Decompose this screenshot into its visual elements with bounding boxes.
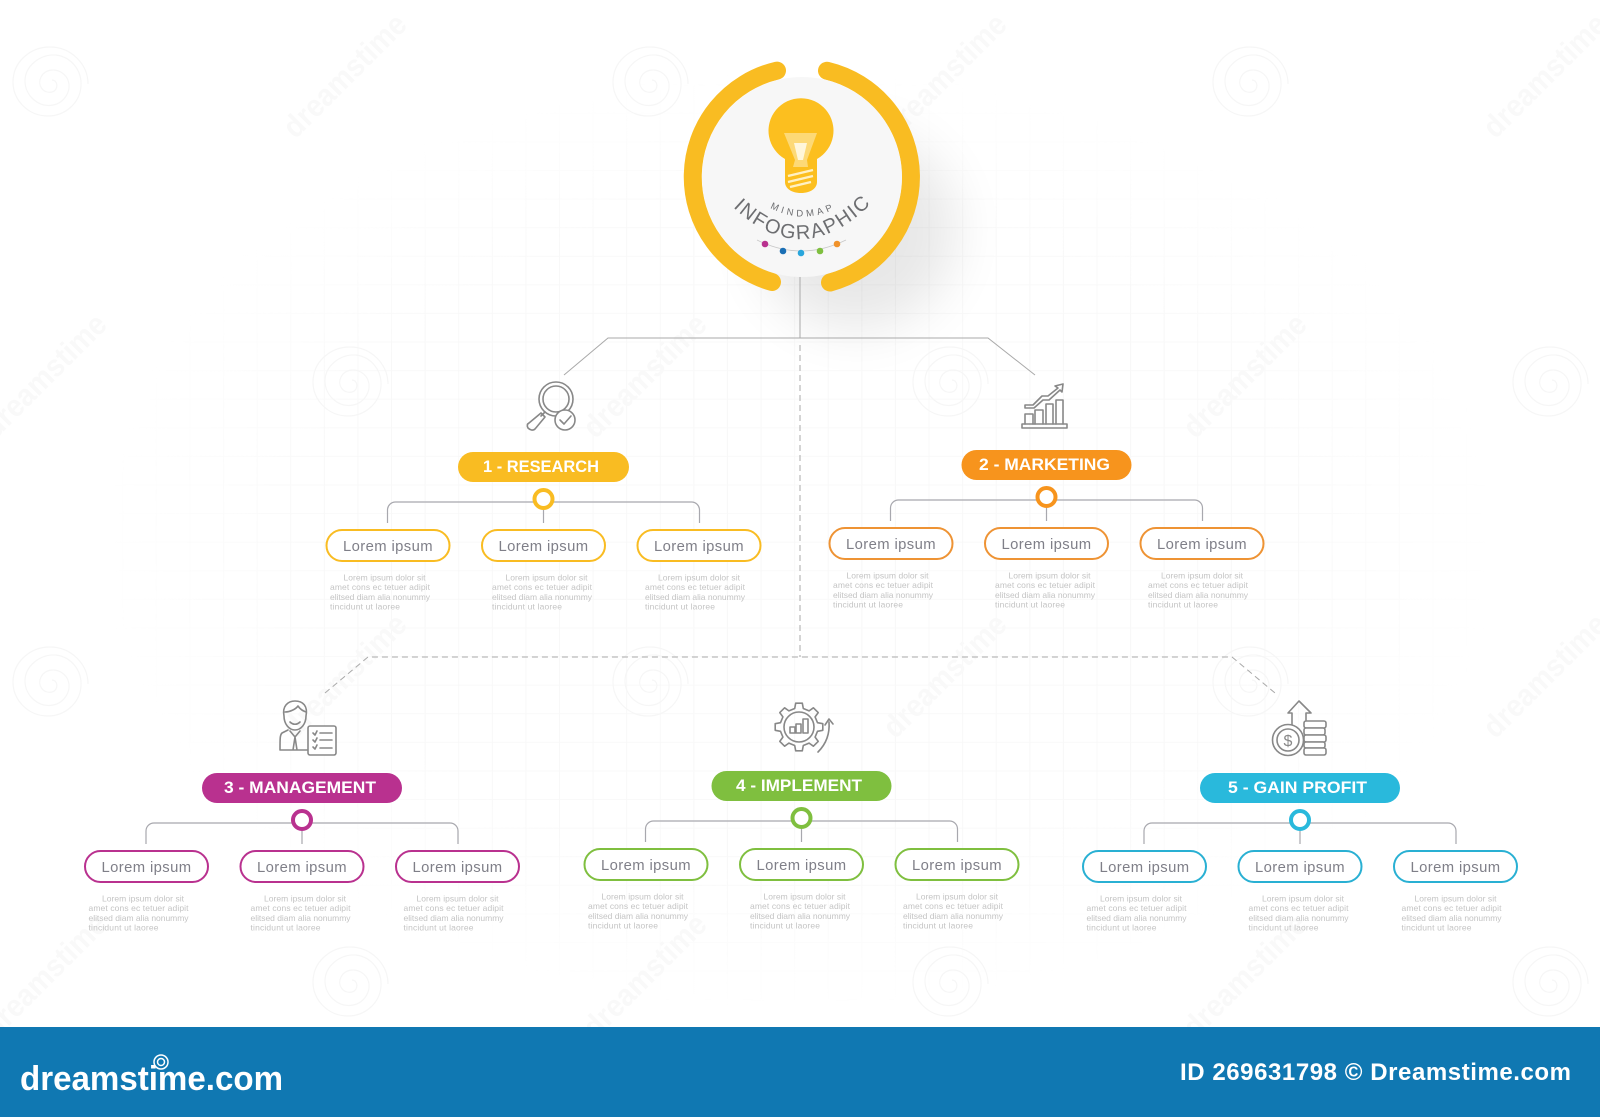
node ring: [534, 490, 552, 508]
item 3: [638, 530, 760, 612]
icon: magnifier with check: [527, 382, 575, 430]
item 2: Lorem ipsum dolor sit: [1262, 894, 1345, 904]
item 3: amet cons ec tetuer adipit: [1402, 903, 1502, 913]
item 3: Lorem ipsum dolor sit: [658, 572, 741, 582]
node ring: [1038, 488, 1056, 506]
item 3: [896, 849, 1018, 931]
icon: coins with up arrow: [1272, 701, 1326, 756]
item 3: Lorem ipsum dolor sit: [1161, 570, 1244, 580]
watermark text: dreamstime: [876, 607, 1014, 745]
item 3: amet cons ec tetuer adipit: [645, 582, 746, 592]
item 1: tincidunt ut laoree: [1086, 923, 1157, 933]
item 2: elitsed diam alia nonummy: [995, 590, 1096, 600]
item 1: tincidunt ut laoree: [88, 923, 159, 933]
item 1: amet cons ec tetuer adipit: [833, 580, 934, 590]
hub white disc: [702, 77, 902, 277]
item 3: Lorem ipsum: [654, 538, 744, 555]
item 2: tincidunt ut laoree: [250, 923, 321, 933]
section 4: implement: [584, 771, 1018, 931]
item 1: Lorem ipsum: [601, 857, 691, 874]
item 1: Lorem ipsum dolor sit: [102, 894, 185, 904]
item 3: Lorem ipsum dolor sit: [1414, 894, 1497, 904]
hub dotted garland: [757, 240, 846, 256]
item 1: amet cons ec tetuer adipit: [88, 903, 189, 913]
section 2: marketing: [830, 450, 1264, 610]
item 3: amet cons ec tetuer adipit: [404, 903, 504, 913]
watermark text: dreamstime: [576, 307, 714, 445]
watermark text: dreamstime: [276, 7, 414, 145]
node ring: [293, 811, 311, 829]
item 3: tincidunt ut laoree: [645, 602, 715, 612]
central hub: [684, 62, 920, 292]
pill: 2 - MARKETING: 2 - MARKETING: [979, 455, 1110, 474]
branch connector: [1144, 823, 1456, 844]
item 3: amet cons ec tetuer adipit: [903, 901, 1004, 911]
item 1: Lorem ipsum dolor sit: [602, 892, 684, 902]
item 1: [85, 851, 208, 933]
branch connector: [646, 821, 958, 842]
section 5: gain profit: [1083, 773, 1517, 933]
hub subtitle: MINDMAP: MINDMAP: [770, 202, 831, 216]
footer bar: [0, 1027, 1600, 1117]
item 2: Lorem ipsum: [1255, 859, 1345, 876]
item 2: [482, 530, 605, 612]
footer image id: ID 269631798 © Dreamstime.com: [1180, 1059, 1571, 1086]
item 1: [326, 530, 450, 612]
solid connectors from hub to sections 1 and 2: [564, 277, 1035, 375]
item 3: tincidunt ut laoree: [404, 923, 474, 933]
pill: 4 - IMPLEMENT: [712, 771, 892, 801]
watermark text: dreamstime: [276, 607, 414, 745]
item 2: amet cons ec tetuer adipit: [995, 580, 1096, 590]
item 3: [396, 851, 519, 933]
item 1: [830, 528, 952, 610]
icon: manager with checklist: [280, 701, 336, 755]
item 2: Lorem ipsum dolor sit: [264, 894, 347, 904]
item 2: Lorem ipsum dolor sit: [506, 572, 588, 582]
watermark text: dreamstime: [876, 7, 1014, 145]
item 2: tincidunt ut laoree: [1248, 923, 1319, 933]
item 2: Lorem ipsum dolor sit: [1008, 570, 1091, 580]
dashed connectors to sections 3, 4 and 5: [325, 345, 1275, 693]
branch connector: [388, 502, 700, 523]
item 2: elitsed diam alia nonummy: [750, 911, 851, 921]
footer logo text: dreamstime.com: [20, 1060, 283, 1098]
item 3: elitsed diam alia nonummy: [645, 592, 746, 602]
item 1: tincidunt ut laoree: [833, 600, 903, 610]
item 1: tincidunt ut laoree: [588, 921, 658, 931]
watermark text: dreamstime: [1176, 907, 1314, 1045]
item 1: [1083, 851, 1206, 933]
item 1: amet cons ec tetuer adipit: [1086, 903, 1187, 913]
item 3: [1394, 851, 1517, 933]
watermark text: dreamstime: [1176, 307, 1314, 445]
item 3: [1140, 528, 1264, 610]
section 1: research: [326, 452, 760, 612]
item 2: elitsed diam alia nonummy: [492, 592, 593, 602]
item 3: Lorem ipsum dolor sit: [916, 892, 999, 902]
item 2: amet cons ec tetuer adipit: [750, 901, 851, 911]
item 2: elitsed diam alia nonummy: [1248, 913, 1349, 923]
item 1: Lorem ipsum: [846, 536, 936, 553]
pill: 5 - GAIN PROFIT: [1200, 773, 1400, 803]
item 2: tincidunt ut laoree: [750, 921, 820, 931]
item 1: Lorem ipsum: [1100, 859, 1190, 876]
node ring: [1291, 811, 1309, 829]
item 1: Lorem ipsum: [343, 538, 433, 555]
item 2: tincidunt ut laoree: [995, 600, 1065, 610]
item 1: elitsed diam alia nonummy: [88, 913, 189, 923]
item 3: Lorem ipsum dolor sit: [416, 894, 499, 904]
node ring: [792, 809, 810, 827]
item 1: Lorem ipsum dolor sit: [846, 570, 929, 580]
item 3: tincidunt ut laoree: [1148, 600, 1218, 610]
item 1: amet cons ec tetuer adipit: [330, 582, 431, 592]
item 1: elitsed diam alia nonummy: [330, 592, 431, 602]
item 2: [985, 528, 1108, 610]
pill: 3 - MANAGEMENT: [202, 773, 402, 803]
pill: 3 - MANAGEMENT: 3 - MANAGEMENT: [224, 778, 377, 797]
item 2: Lorem ipsum: [756, 857, 846, 874]
branch connector: [146, 823, 458, 844]
item 3: tincidunt ut laoree: [1402, 923, 1472, 933]
item 3: Lorem ipsum: [912, 857, 1002, 874]
item 1: Lorem ipsum: [102, 859, 192, 876]
item 1: tincidunt ut laoree: [330, 602, 400, 612]
item 1: amet cons ec tetuer adipit: [588, 901, 689, 911]
item 3: tincidunt ut laoree: [903, 921, 973, 931]
watermark text: dreamstime: [576, 907, 714, 1045]
item 3: amet cons ec tetuer adipit: [1148, 580, 1249, 590]
pill: 1 - RESEARCH: 1 - RESEARCH: [483, 457, 599, 476]
icon: gear with chart and arrow: [775, 703, 833, 752]
item 3: elitsed diam alia nonummy: [1402, 913, 1502, 923]
pill: 4 - IMPLEMENT: 4 - IMPLEMENT: [736, 776, 863, 795]
pill: 2 - MARKETING: [962, 450, 1132, 480]
item 1: elitsed diam alia nonummy: [588, 911, 689, 921]
pill: 1 - RESEARCH: [458, 452, 629, 482]
item 3: elitsed diam alia nonummy: [1148, 590, 1249, 600]
item 2: amet cons ec tetuer adipit: [250, 903, 351, 913]
hub title: INFOGRAPHIC: INFOGRAPHIC: [734, 196, 868, 240]
item 2: Lorem ipsum: [257, 859, 347, 876]
section 3: management: [85, 773, 519, 933]
item 2: [740, 849, 863, 931]
item 2: amet cons ec tetuer adipit: [492, 582, 593, 592]
item 3: Lorem ipsum: [1410, 859, 1500, 876]
item 2: [1238, 851, 1362, 933]
item 3: Lorem ipsum: [412, 859, 502, 876]
item 1: Lorem ipsum dolor sit: [344, 572, 426, 582]
item 3: elitsed diam alia nonummy: [903, 911, 1004, 921]
item 1: [584, 849, 708, 931]
hub yellow arcs: [693, 71, 911, 282]
central hub soft shadow: [756, 130, 956, 330]
item 3: elitsed diam alia nonummy: [404, 913, 504, 923]
item 3: Lorem ipsum: [1157, 536, 1247, 553]
item 2: Lorem ipsum: [498, 538, 588, 555]
icon: light bulb: [769, 98, 834, 193]
item 1: elitsed diam alia nonummy: [1086, 913, 1187, 923]
item 1: elitsed diam alia nonummy: [833, 590, 934, 600]
item 2: [240, 851, 364, 933]
footer logo spiral icon: [154, 1055, 168, 1069]
branch connector: [890, 500, 1202, 521]
icon: rising bar chart: [1022, 384, 1067, 428]
item 2: Lorem ipsum: [1002, 536, 1092, 553]
item 1: Lorem ipsum dolor sit: [1100, 894, 1183, 904]
item 2: tincidunt ut laoree: [492, 602, 562, 612]
icon: coins with up arrow: $: [1284, 733, 1293, 750]
pill: 5 - GAIN PROFIT: 5 - GAIN PROFIT: [1228, 778, 1368, 797]
item 2: elitsed diam alia nonummy: [250, 913, 351, 923]
item 2: Lorem ipsum dolor sit: [764, 892, 846, 902]
item 2: amet cons ec tetuer adipit: [1248, 903, 1349, 913]
